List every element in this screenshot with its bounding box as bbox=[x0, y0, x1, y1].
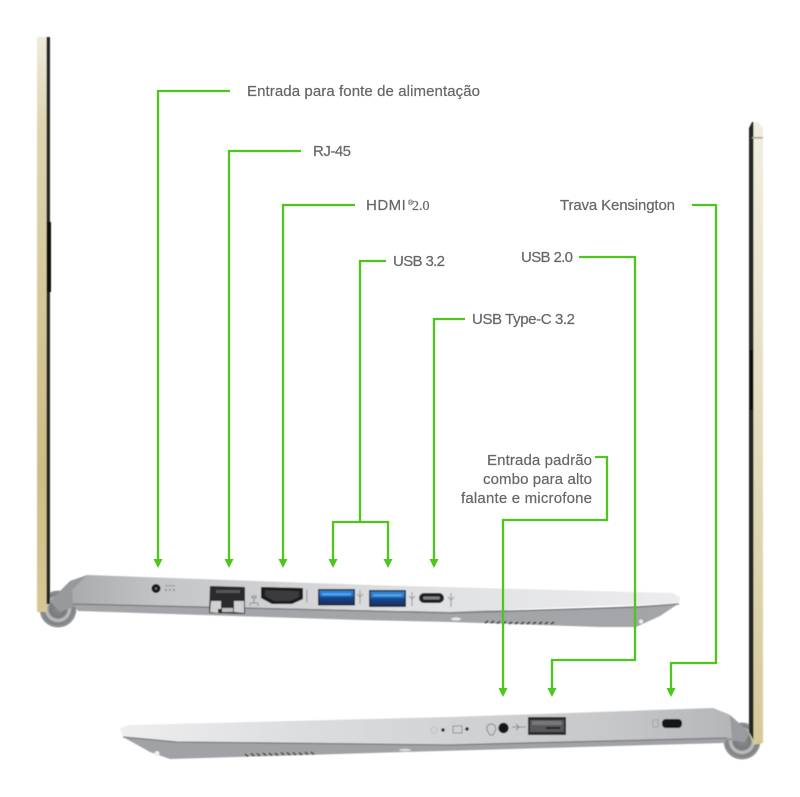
label: audio combo: combo para alto bbox=[483, 471, 592, 488]
HDMI port bbox=[261, 587, 308, 604]
RJ-45 port bbox=[209, 586, 245, 614]
right base underside bbox=[123, 737, 727, 759]
USB symbol middle bbox=[409, 592, 415, 606]
left status light bbox=[451, 618, 461, 620]
USB 3.2 port left bbox=[318, 589, 355, 606]
label: HDMI: ® bbox=[408, 199, 414, 207]
label: USB 3.2: USB 3.2 bbox=[393, 253, 445, 270]
USB symbol right bbox=[448, 593, 454, 607]
left foot bbox=[639, 620, 643, 624]
arrow: USB 2.0 bbox=[548, 257, 635, 697]
right speaker grille bbox=[245, 752, 314, 756]
label: HDMI: HDMI bbox=[366, 197, 406, 214]
USB symbol left bbox=[357, 590, 363, 604]
right foot bbox=[154, 751, 160, 756]
arrow: USB Type-C bbox=[430, 319, 465, 568]
label: USB 2.0: USB 2.0 bbox=[521, 249, 573, 266]
laptop: left side view bbox=[37, 37, 680, 628]
Kensington slot bbox=[662, 719, 682, 728]
right status lights bbox=[399, 749, 411, 751]
USB 3.2 port right bbox=[369, 590, 406, 607]
label: Kensington lock: Trava Kensington bbox=[560, 197, 675, 214]
USB symbol bottom bbox=[512, 724, 526, 730]
status icons bbox=[431, 726, 469, 733]
right hinge bbox=[713, 708, 760, 760]
label: USB Type-C: USB Type-C 3.2 bbox=[472, 311, 575, 328]
label: audio combo: falante e microfone bbox=[461, 490, 592, 507]
audio jack bbox=[498, 723, 509, 733]
left base underside bbox=[73, 603, 678, 627]
USB 2.0 port bbox=[528, 717, 566, 735]
left base top surface bbox=[72, 575, 680, 612]
label: HDMI: 2.0 bbox=[412, 199, 430, 214]
laptop: right side view bbox=[120, 122, 763, 760]
label: power input: Entrada para fonte de alimentação bbox=[247, 83, 480, 100]
arrow: USB 3.2 double bbox=[328, 261, 392, 568]
headset icon bbox=[487, 724, 496, 735]
left hinge bbox=[40, 575, 87, 628]
arrow: power input bbox=[154, 91, 230, 568]
right lid edge bbox=[749, 122, 763, 745]
left lid edge bbox=[37, 37, 51, 612]
network icon bbox=[250, 596, 258, 606]
lock icon bbox=[653, 720, 658, 727]
right base top surface bbox=[120, 708, 732, 745]
arrow: audio combo bbox=[498, 457, 607, 697]
arrow: RJ-45 bbox=[224, 151, 301, 568]
label: RJ-45: RJ-45 bbox=[313, 143, 351, 160]
USB-C port bbox=[419, 593, 444, 603]
left speaker grille bbox=[485, 621, 554, 624]
power jack bbox=[152, 584, 175, 593]
arrow: Kensington lock bbox=[666, 205, 716, 697]
label: audio combo: Entrada padrão bbox=[487, 452, 592, 469]
arrow: HDMI bbox=[278, 205, 355, 568]
